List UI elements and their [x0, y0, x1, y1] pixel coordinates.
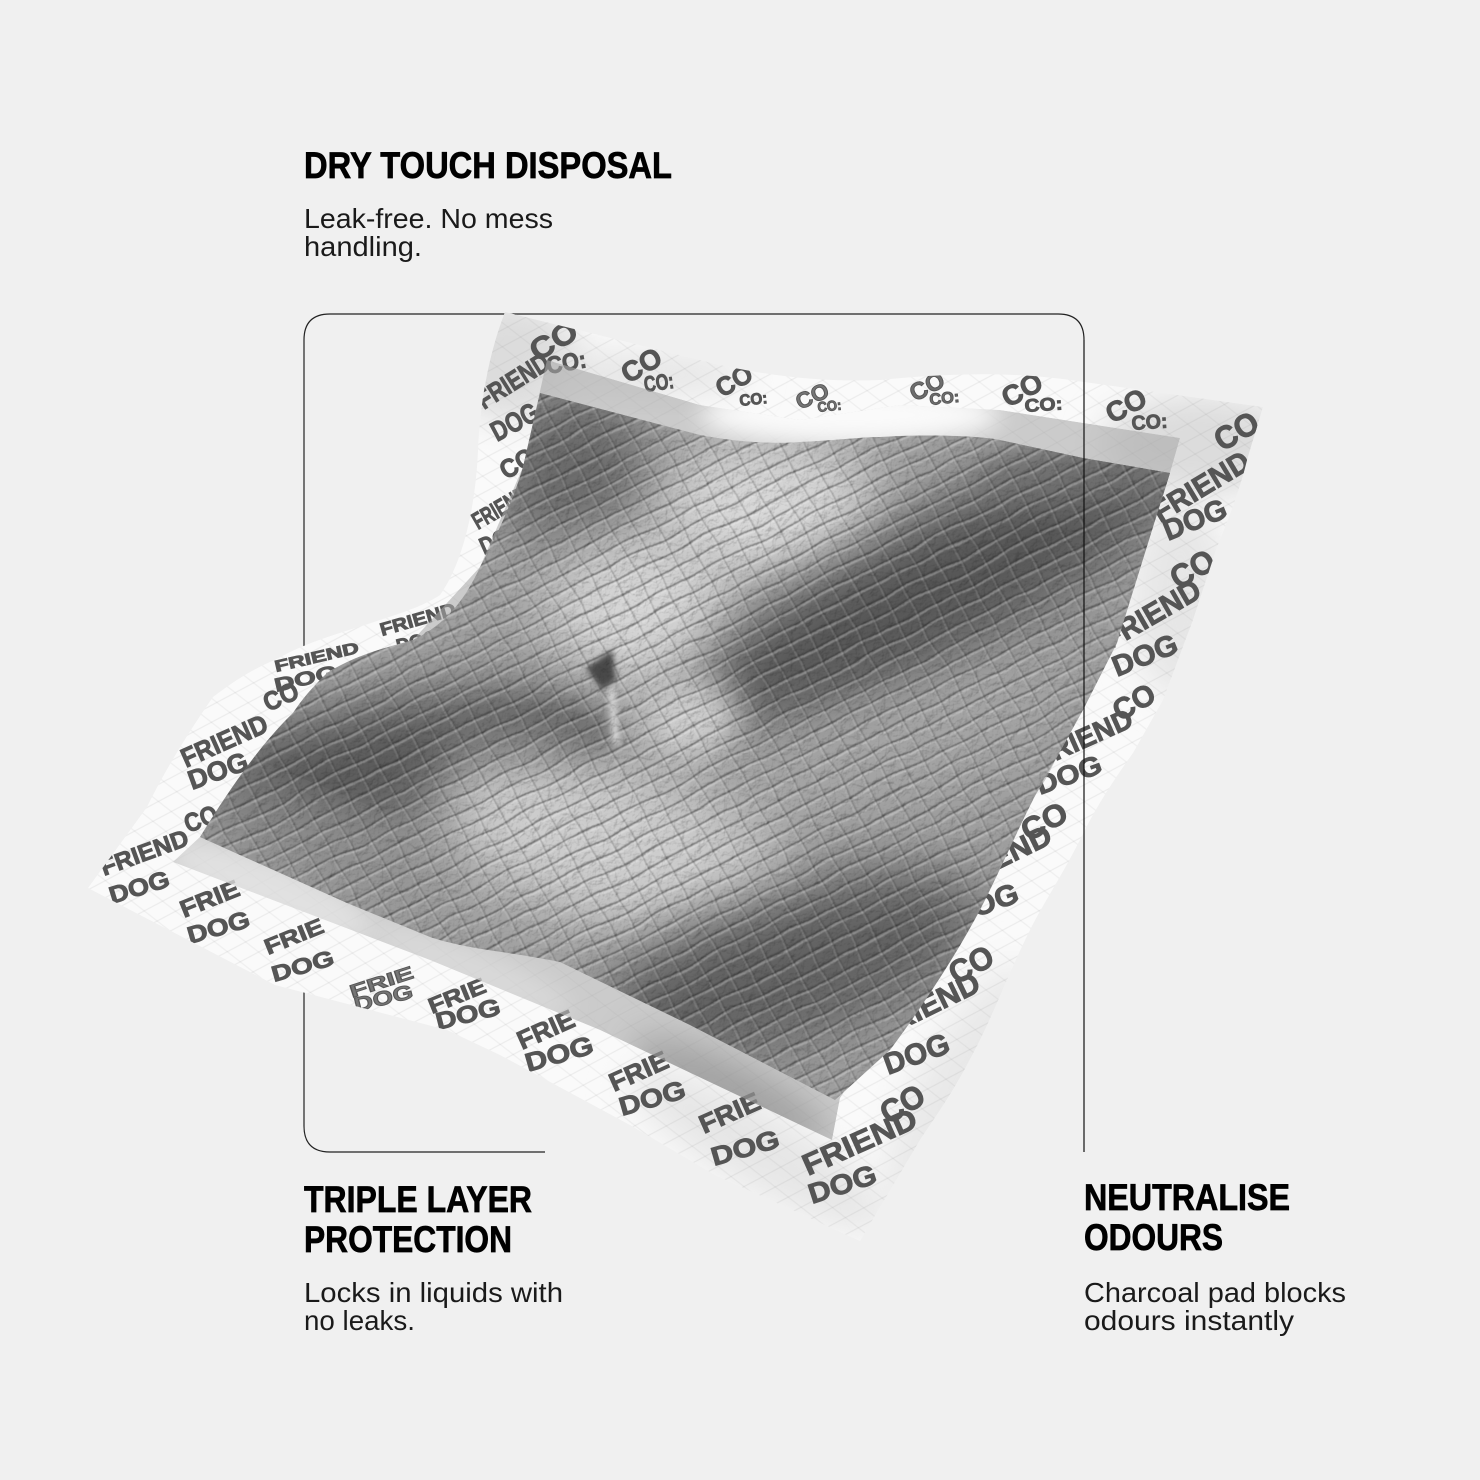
logo column: right side: CO [942, 938, 1000, 991]
logo column: right side [797, 404, 1265, 1210]
heading: PROTECTION [304, 1219, 512, 1260]
logo column: right side: FRIEND [1097, 573, 1207, 656]
logo column: left side: DOG [475, 518, 527, 560]
logo column: right side: CO [1107, 677, 1162, 728]
heading [1084, 1177, 1290, 1258]
logo column: right side: FRIEND [939, 820, 1057, 899]
shading: folds and shadows [194, 380, 1212, 1099]
logo row: bottom edge: DOG [184, 906, 253, 950]
body text: Locks in liquids with [304, 1277, 563, 1308]
logo row: bottom edge: FRIE [347, 962, 416, 1002]
body text: handling. [304, 231, 422, 262]
printed logos on the pad border [97, 314, 1265, 1210]
logo row: top edge: CO: [544, 346, 588, 380]
logo row: top edge: CO [792, 378, 833, 415]
logo column: left side: FRIEND [378, 599, 458, 640]
logo column: left side: DOG [272, 662, 339, 697]
rounded frame: left and top lines behind the pad [304, 314, 1084, 1152]
logo column: left side: FRIEND [97, 825, 193, 882]
logo column: left side: DOG [485, 396, 544, 447]
logo column: left side: CO [494, 441, 540, 485]
logo row: bottom edge: DOG [352, 981, 415, 1017]
pad: training pad with charcoal core [60, 290, 1300, 1260]
logo row: bottom edge: FRIE [604, 1045, 673, 1097]
logo row: top edge: CO: [1024, 393, 1063, 416]
logo column: left side: FRIEND [471, 347, 555, 415]
logo column: right side: FRIEND [1147, 445, 1256, 529]
body text [304, 203, 553, 262]
logo row: top edge: CO: [817, 397, 842, 415]
callout: neutralise odours [1084, 1177, 1346, 1336]
logo row: bottom edge: DOG [433, 994, 503, 1036]
logo column: right side: CO [1208, 404, 1265, 458]
central fold [586, 650, 616, 690]
logo row: bottom edge: DOG [615, 1074, 689, 1122]
logo row: top edge: CO [616, 341, 667, 389]
logo column: right side: FRIEND [797, 1103, 922, 1182]
heading: TRIPLE LAYER [304, 1179, 532, 1220]
logo row: bottom edge [176, 875, 783, 1172]
logo column: right side: FRIEND [1030, 703, 1137, 773]
logo column: right side: DOG [1108, 628, 1183, 683]
logo column: left side: DOG [184, 746, 252, 796]
logo column: left side [97, 347, 555, 910]
callout: triple layer protection [304, 1179, 563, 1336]
logo column: right side: CO [1164, 542, 1221, 596]
semi-transparent outer layer band [157, 360, 1180, 1165]
logo column: right side: FRIEND [869, 967, 986, 1046]
logo row: top edge [530, 325, 1166, 430]
body text [1084, 1277, 1346, 1336]
wrinkle noise: core [202, 394, 1168, 1097]
logo column: right side: CO [1015, 795, 1074, 848]
logo column: left side: CO [258, 675, 303, 717]
logo column: left side: CO [180, 799, 222, 839]
logo column: right side: DOG [879, 1027, 954, 1082]
pad sheet [60, 290, 1300, 1260]
logo row: top edge: CO [905, 367, 950, 407]
heading: ODOURS [1084, 1217, 1223, 1258]
logo row: top edge: CO [710, 358, 758, 403]
logo row: top edge: CO: [929, 389, 960, 409]
logo row: top edge: CO: [739, 390, 768, 410]
heading [304, 1179, 532, 1260]
logo column: left side: FRIEND [468, 482, 533, 535]
logo column: left side: DOG [106, 866, 173, 910]
logo column: right side: DOG [946, 878, 1023, 932]
heading: NEUTRALISE [1084, 1177, 1290, 1218]
logo row: bottom edge: FRIE [425, 973, 490, 1019]
body text: Leak-free. No mess [304, 203, 553, 234]
logo column: right side: DOG [1159, 493, 1232, 547]
heading: DRY TOUCH DISPOSAL [304, 145, 672, 186]
body text: Charcoal pad blocks [1084, 1277, 1346, 1308]
body text [304, 1277, 563, 1336]
logo row: top edge: CO [996, 366, 1048, 413]
logo row: top edge: CO: [1131, 411, 1168, 435]
logo row: bottom edge: FRIE [694, 1086, 765, 1139]
logo row: top edge: CO [1100, 382, 1152, 429]
logo row: bottom edge: DOG [707, 1124, 783, 1172]
quilted texture [202, 394, 1167, 1098]
logo column: left side: FRIEND [176, 709, 272, 773]
logo row: top edge: CO: [642, 368, 675, 397]
logo row: bottom edge: DOG [521, 1030, 597, 1078]
logo column: right side: DOG [1032, 749, 1106, 801]
body text: odours instantly [1084, 1305, 1294, 1336]
logo column: right side: CO [874, 1077, 931, 1131]
logo column: left side: DOG [394, 626, 440, 656]
body text: no leaks. [304, 1305, 415, 1336]
logo row: top edge: CO [524, 314, 584, 368]
frame: right line over the pad [1083, 340, 1085, 1152]
logo row: bottom edge: FRIE [261, 913, 327, 960]
logo column: right side: DOG [804, 1159, 880, 1210]
logo row: bottom edge: FRIE [512, 1004, 579, 1055]
charcoal core layer [200, 393, 1170, 1100]
logo row: bottom edge: FRIE [176, 875, 244, 924]
logo row: bottom edge: DOG [268, 945, 337, 987]
callout: dry touch disposal [304, 145, 672, 262]
logo column: left side: FRIEND [273, 640, 361, 676]
